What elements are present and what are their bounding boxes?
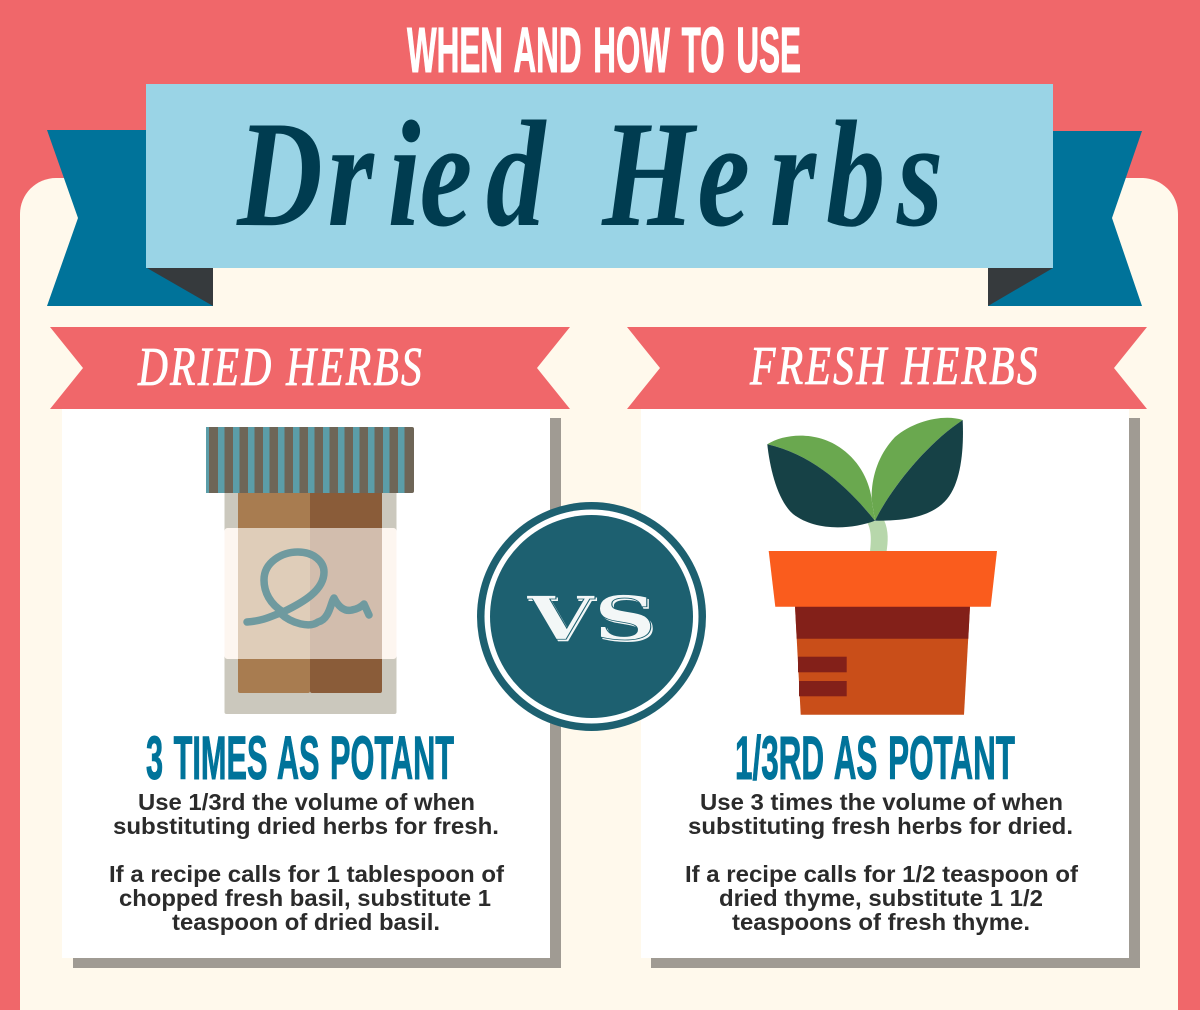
banner panel — [146, 84, 1053, 268]
VS badge: VS — [526, 584, 656, 654]
ribbon heading: fresh herbs: FRESH HERBS — [749, 335, 1040, 396]
card shadow — [73, 418, 561, 968]
ribbon heading: fresh herbs — [627, 327, 1147, 409]
text: WHEN AND HOW TO USE — [407, 14, 801, 86]
text block: dried herbs advice — [109, 789, 504, 935]
text block: dried herbs advice: teaspoon of dried basil. — [172, 909, 440, 935]
card shadow — [651, 418, 1140, 968]
text block: fresh herbs advice — [685, 789, 1078, 935]
card — [641, 408, 1129, 958]
icon: spice jar — [206, 427, 414, 714]
right ribbon tail — [988, 131, 1142, 306]
text block: dried herbs advice: If a recipe calls for 1 tablespoon of — [109, 861, 504, 887]
VS badge — [477, 502, 706, 731]
icon: potted seedling — [767, 418, 997, 715]
text block: dried herbs advice: Use 1/3rd the volume of when — [138, 789, 475, 815]
text block: fresh herbs advice: Use 3 times the volume of when — [700, 789, 1063, 815]
ribbon heading: dried herbs: DRIED HERBS — [137, 336, 424, 397]
text block: fresh herbs advice: If a recipe calls for 1/2 teaspoon of — [685, 861, 1078, 887]
cream background panel — [20, 178, 1178, 1010]
panel: dried herbs — [50, 327, 570, 968]
panel: fresh herbs — [627, 327, 1147, 968]
title banner — [47, 84, 1142, 306]
VS badge: VS — [528, 586, 658, 656]
left ribbon tail — [47, 130, 213, 306]
text block: fresh herbs advice: substituting fresh herbs for dried. — [688, 813, 1073, 839]
ribbon heading: dried herbs — [50, 327, 570, 409]
main title: Dried Herbs — [236, 91, 943, 258]
text block: dried herbs advice: substituting dried herbs for fresh. — [113, 813, 499, 839]
text block: dried herbs advice: chopped fresh basil, substitute 1 — [119, 885, 491, 911]
card — [62, 409, 550, 958]
heading: 3 times as potent: 3 TIMES AS POTANT — [146, 724, 454, 792]
text block: fresh herbs advice: dried thyme, substitute 1 1/2 — [719, 885, 1043, 911]
text block: fresh herbs advice: teaspoons of fresh thyme. — [732, 909, 1030, 935]
